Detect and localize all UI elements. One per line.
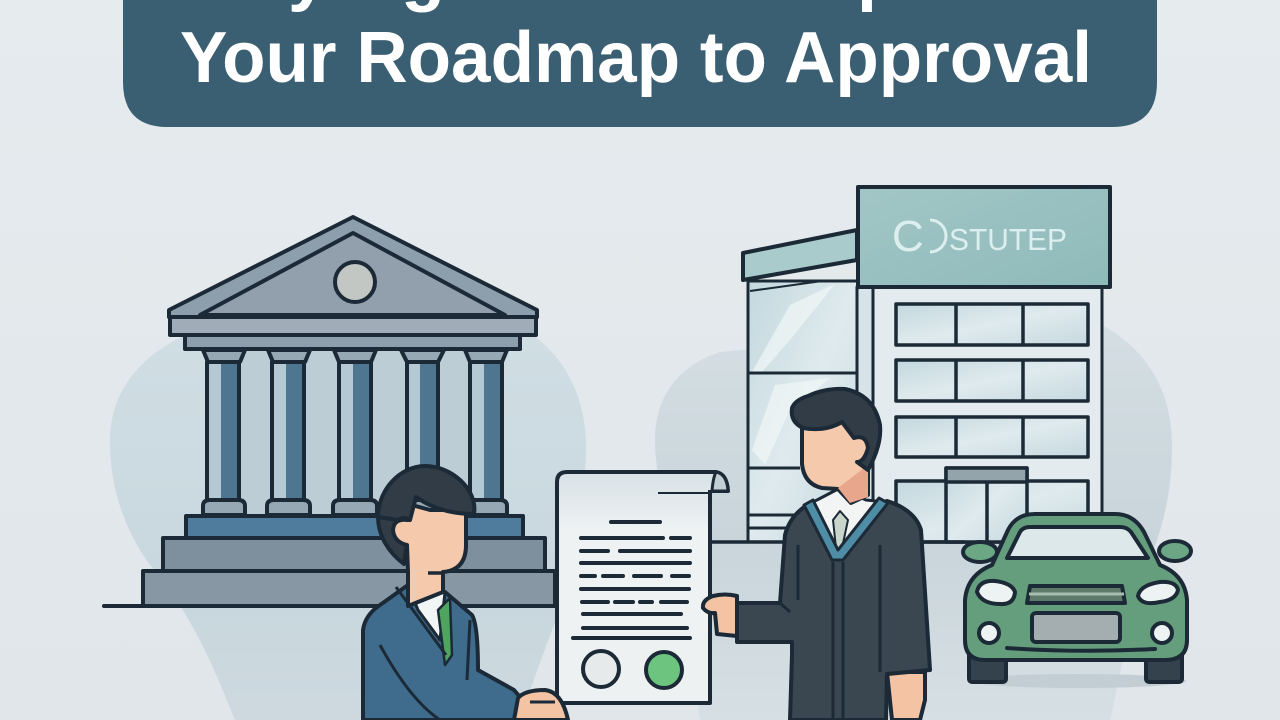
right person face	[802, 420, 868, 503]
car shadow	[970, 674, 1186, 688]
window rows	[896, 304, 1088, 542]
pediment medallion	[335, 262, 375, 302]
right person lower hand	[887, 672, 925, 720]
document text lines	[573, 522, 690, 638]
left person suit	[363, 585, 540, 720]
left person handing document	[363, 466, 568, 720]
title text: Your Roadmap to Approval	[180, 18, 1092, 98]
fog lights	[979, 623, 1172, 643]
windshield	[1007, 527, 1148, 558]
right person shirt and tie	[806, 488, 885, 555]
left person hair top	[378, 466, 474, 520]
green car	[963, 514, 1191, 682]
background blob behind courthouse	[110, 328, 586, 720]
left wing glass reflections	[752, 284, 835, 465]
column 4	[400, 350, 445, 515]
courthouse building	[104, 217, 556, 606]
right person raised hand	[703, 594, 737, 636]
right person gown	[737, 501, 930, 720]
title banner	[123, 0, 1157, 127]
headlights	[977, 581, 1178, 604]
signature circle: green	[646, 652, 682, 688]
left person hand	[514, 690, 568, 720]
right person hair	[792, 389, 880, 470]
column 1	[203, 350, 245, 515]
column 3	[333, 350, 377, 515]
column 2	[267, 350, 310, 515]
left person hair back	[378, 510, 412, 564]
grille	[1027, 586, 1125, 603]
right person in gown	[703, 389, 930, 720]
background blob behind dealership	[655, 320, 1172, 720]
signature circle: empty	[583, 651, 619, 687]
dealership sign	[858, 187, 1110, 287]
dealership building	[711, 187, 1110, 542]
courthouse steps	[104, 516, 556, 606]
license plate	[1032, 613, 1120, 642]
right person collar stole	[804, 498, 888, 560]
dealership building: STUTEP	[949, 222, 1067, 257]
document scroll	[557, 472, 728, 703]
left person ear and face	[393, 505, 466, 606]
column 5	[465, 350, 507, 515]
entrance door	[946, 468, 1027, 542]
sign lettering: C	[892, 212, 924, 261]
